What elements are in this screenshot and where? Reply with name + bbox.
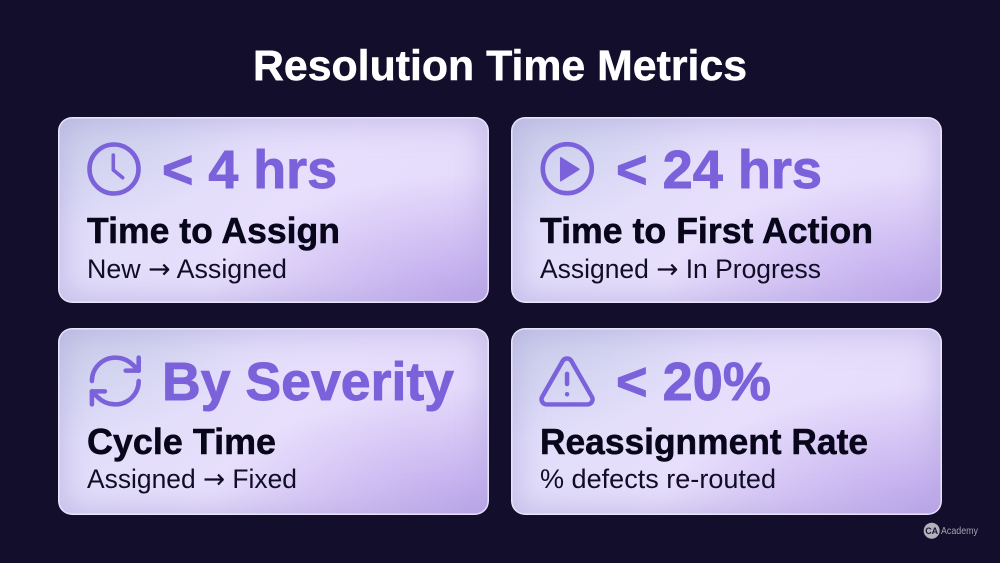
panel: reassignment rate <box>511 328 942 515</box>
panel: cycle time <box>58 328 489 515</box>
metric description: % defects re-routed <box>540 464 776 494</box>
metric value: under 4 hours: < 4 hrs <box>162 140 337 200</box>
metric description: New → Assigned <box>87 254 287 285</box>
metric description: Assigned → In Progress <box>540 254 821 285</box>
icon: clock <box>90 144 138 194</box>
title: Resolution Time Metrics <box>253 42 747 90</box>
metric name: time to assign: Time to Assign <box>87 210 340 251</box>
logo: academy watermark <box>924 522 978 539</box>
panel: time to assign <box>58 117 489 303</box>
metric value: under 24 hours: < 24 hrs <box>616 140 822 200</box>
metric description: Assigned → Fixed <box>87 464 297 495</box>
panel: time to first action <box>511 117 942 303</box>
metric name: time to first action: Time to First Action <box>540 210 873 251</box>
logo: academy watermark: Academy <box>941 526 978 537</box>
metric value: under 20 percent: < 20% <box>616 352 771 412</box>
metric name: reassignment rate: Reassignment Rate <box>540 421 868 462</box>
metric value: by severity: By Severity <box>162 352 454 412</box>
icon: refresh arrows <box>92 358 139 404</box>
logo: academy watermark: CA <box>925 526 939 536</box>
metric name: cycle time: Cycle Time <box>87 421 276 462</box>
icon: play <box>543 144 592 193</box>
icon: warning triangle <box>542 359 593 404</box>
